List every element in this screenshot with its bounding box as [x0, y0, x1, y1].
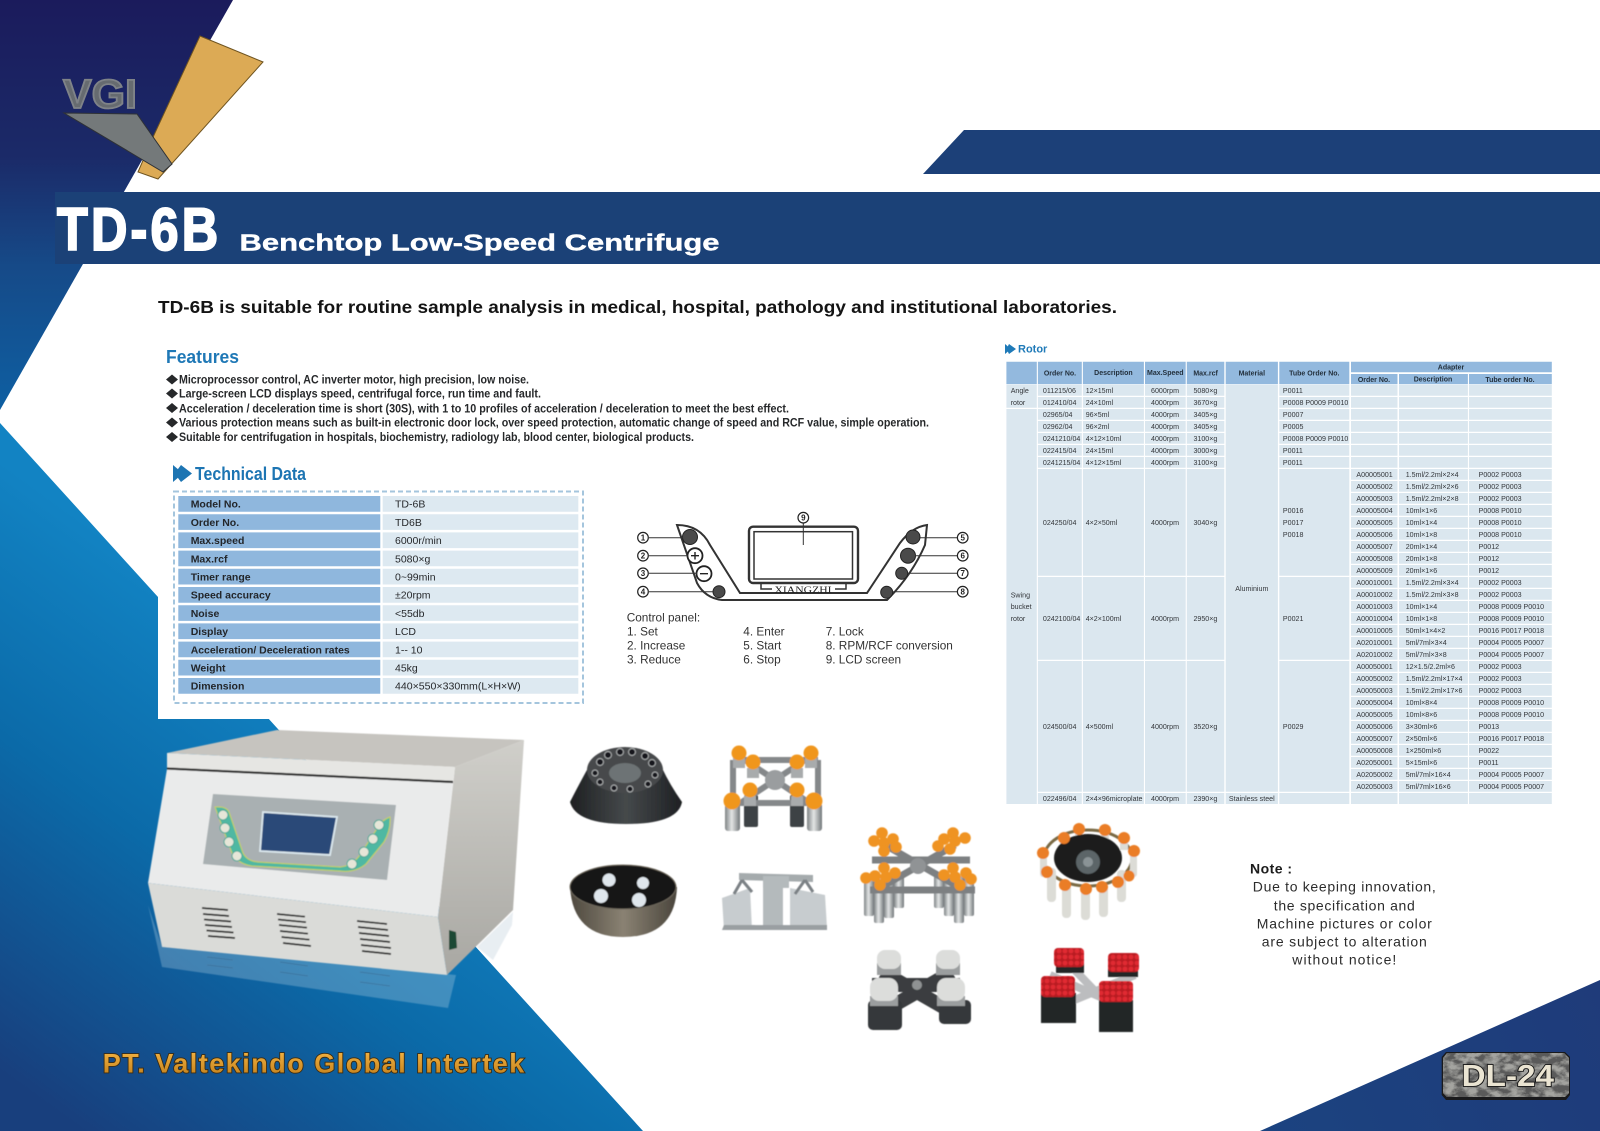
- rotor table column: adapter order number: A00005004: [1356, 507, 1393, 515]
- control panel number markers: 8: [960, 588, 965, 596]
- logo: VGI: VGI: [63, 71, 137, 117]
- rotor table column: max rcf: 3000×g: [1193, 447, 1217, 455]
- rotor table header labels: Max.rcf: [1193, 370, 1219, 378]
- rotor table column: adapter order number: A02050001: [1356, 759, 1393, 767]
- rotor table column: adapter description: [1406, 471, 1463, 791]
- rotor table column: max speed: 4000rpm: [1151, 795, 1179, 803]
- rotor table column: description: 2×4×96microplate: [1086, 795, 1143, 803]
- badge: page code: [1442, 1052, 1570, 1100]
- technical data labels: Max.speed: [191, 535, 244, 547]
- rotor table column: adapter order number: A00050004: [1356, 699, 1393, 707]
- rotor table column: max speed: [1151, 387, 1179, 803]
- features bullet list: Suitable for centrifugation in hospitals, biochemistry, radiology lab, blood center, biological products.: [179, 430, 694, 444]
- rotor table column: adapter tube order number: P0002 P0003: [1479, 687, 1522, 695]
- rotor table column: adapter description: 10ml×8×4: [1406, 699, 1437, 707]
- rotor table column: material: Aluminium: [1235, 585, 1268, 593]
- centrifuge power switch: [449, 930, 457, 950]
- rotor table column: max speed: 4000rpm: [1151, 447, 1179, 455]
- rotor table column: adapter order number: A00050006: [1356, 723, 1393, 731]
- features heading: Features: [166, 347, 239, 367]
- rotor table column: adapter tube order number: P0013: [1479, 723, 1499, 731]
- rotor table column: order number: 012410/04: [1043, 399, 1076, 407]
- control panel number markers: [638, 512, 968, 597]
- control panel legend: 4. Enter: [743, 625, 785, 639]
- rotor table column: adapter order number: A00050007: [1356, 735, 1393, 743]
- rotor table column: max rcf: 3670×g: [1193, 399, 1217, 407]
- technical data labels: Display: [191, 626, 228, 638]
- note body: Machine pictures or color: [1257, 916, 1432, 932]
- rotor table column: tube order number: P0007: [1283, 411, 1303, 419]
- rotor table column: max speed: 4000rpm: [1151, 519, 1179, 527]
- background: bottom right blue triangle: [1260, 980, 1600, 1131]
- rotor table column: adapter description: 12×1.5/2.2ml×6: [1406, 663, 1455, 671]
- background: top left dark blue corner: [0, 0, 233, 410]
- technical data labels: Model No.: [191, 499, 241, 511]
- intro sentence: TD-6B is suitable for routine sample analysis in medical, hospital, pathology and institutional laboratories.: [158, 297, 1117, 317]
- technical data labels: [191, 499, 350, 693]
- technical data labels: Speed accuracy: [191, 590, 271, 602]
- rotor table header labels: Order No.: [1044, 370, 1076, 378]
- control panel legend: 9. LCD screen: [826, 652, 901, 666]
- rotor table column: adapter description: 10ml×1×6: [1406, 507, 1437, 515]
- rotor table column: tube order number: P0011: [1283, 447, 1303, 455]
- centrifuge front upper: [148, 769, 453, 917]
- rotor table column: order number: 011215/06: [1043, 387, 1076, 395]
- footer company name: PT. Valtekindo Global Intertek: [103, 1049, 525, 1079]
- rotor table column: rotor type: bucket: [1011, 603, 1032, 611]
- rotor table column: description: 4×2×50ml: [1086, 519, 1118, 527]
- rotor table header labels: Description: [1094, 370, 1133, 377]
- control panel brand: XIANGZHI: [774, 586, 832, 596]
- rotor table header labels: Material: [1239, 370, 1265, 378]
- photo: centrifuge: [148, 730, 524, 1008]
- rotor table column: description: 4×12×10ml: [1086, 435, 1122, 443]
- rotor table column: adapter description: 10ml×1×8: [1406, 531, 1437, 539]
- rotor table column: adapter tube order number: P0008 P0010: [1479, 519, 1522, 527]
- technical data values: TD6B: [395, 517, 422, 529]
- rotor table column: order number: 0241210/04: [1043, 435, 1080, 443]
- rotor table column: adapter description: 1×250ml×6: [1406, 747, 1441, 755]
- rotor table column: adapter description: 10ml×1×8: [1406, 615, 1437, 623]
- control panel legend: [627, 611, 953, 666]
- logo: VGI: [63, 36, 263, 179]
- photo: angle rotor: [570, 747, 682, 824]
- centrifuge side: [438, 740, 524, 975]
- rotor table column: adapter order number: A00010003: [1356, 603, 1393, 611]
- rotor table column: max speed: 4000rpm: [1151, 399, 1179, 407]
- rotor table column: description: 24×15ml: [1086, 447, 1114, 455]
- rotor table column: adapter tube order number: P0002 P0003: [1479, 579, 1522, 587]
- rotor table column: adapter description: 1.5ml/2.2ml×17×6: [1406, 687, 1463, 695]
- technical data values: LCD: [395, 626, 416, 638]
- control panel number markers: 6: [960, 552, 965, 560]
- rotor table column: max speed: 4000rpm: [1151, 459, 1179, 467]
- rotor table column: max rcf: 3100×g: [1193, 459, 1217, 467]
- photo: multi-tube swing rotor: [860, 827, 977, 923]
- title band: [55, 192, 1600, 264]
- rotor table header cells: [1006, 362, 1552, 384]
- rotor table column: adapter order number: A00005005: [1356, 519, 1393, 527]
- rotor table column: max speed: 6000rpm: [1151, 387, 1179, 395]
- control panel legend: 7. Lock: [826, 625, 864, 639]
- rotor table column: description: 4×500ml: [1086, 723, 1114, 731]
- rotor table column: tube order number: P0011: [1283, 459, 1303, 467]
- rotor table header labels: Description: [1414, 376, 1452, 384]
- rotor table column: tube order number: P0005: [1283, 423, 1303, 431]
- rotor table column: adapter tube order number: P0008 P0009 P0010: [1479, 603, 1544, 611]
- background: top right dark blue stripe: [923, 130, 1600, 174]
- control panel number markers: 9: [801, 514, 806, 522]
- rotor table column: rotor type: [1011, 387, 1032, 623]
- technical data value column: [383, 496, 578, 694]
- centrifuge display panel: [203, 794, 396, 880]
- rotor table column: tube order number: P0017: [1283, 519, 1303, 527]
- control panel leader lines: [649, 523, 957, 592]
- rotor table column: adapter description: 1.5ml/2.2ml×2×4: [1406, 471, 1459, 479]
- technical data dashed frame: [174, 492, 583, 703]
- rotor table column: order number: 024250/04: [1043, 519, 1076, 527]
- centrifuge lid gap: [167, 768, 453, 782]
- technical data labels: Timer range: [191, 572, 251, 584]
- technical data label column: [178, 496, 380, 694]
- rotor table column: adapter description: 1.5ml/2.2ml×2×6: [1406, 483, 1459, 491]
- rotor table column: tube order number: P0011: [1283, 387, 1303, 395]
- rotor table column: material: Stainless steel: [1229, 795, 1275, 803]
- rotor heading icon: [1005, 344, 1016, 354]
- rotor table column: adapter order number: A00010004: [1356, 615, 1393, 623]
- technical data labels: Acceleration/ Deceleration rates: [191, 644, 350, 656]
- rotor table header labels: Adapter: [1438, 364, 1464, 372]
- rotor table header labels: [1044, 364, 1535, 384]
- rotor table column: adapter tube order number: P0011: [1479, 759, 1499, 767]
- technical data values: [395, 499, 521, 693]
- rotor table column: adapter order number: A00050002: [1356, 675, 1393, 683]
- rotor table column: rotor type: Swing: [1011, 592, 1030, 600]
- rotor table column: description: [1086, 387, 1143, 803]
- rotor table column: adapter order number: [1356, 471, 1393, 791]
- rotor table column: adapter description: 1.5ml/2.2ml×17×4: [1406, 675, 1463, 683]
- rotor table column: order number: 024500/04: [1043, 723, 1076, 731]
- rotor table column: adapter order number: A00050005: [1356, 711, 1393, 719]
- note body: Due to keeping innovation,: [1253, 879, 1436, 895]
- rotor table column: max rcf: 3405×g: [1193, 423, 1217, 431]
- technical data values: 0~99min: [395, 572, 436, 584]
- rotor table column: adapter order number: A00005003: [1356, 495, 1393, 503]
- centrifuge reflection: [148, 905, 513, 1008]
- title: model name: TD-6B: [57, 196, 221, 263]
- rotor table column: adapter description: 20ml×1×8: [1406, 555, 1437, 563]
- title: product name: Benchtop Low-Speed Centrifuge: [240, 230, 720, 256]
- rotor table column: order number: 022415/04: [1043, 447, 1076, 455]
- background: lower left blue wedge: [0, 423, 643, 1131]
- control panel legend: 2. Increase: [627, 639, 686, 653]
- note: [1250, 860, 1436, 968]
- rotor table column: adapter description: 1.5ml/2.2ml×3×8: [1406, 591, 1459, 599]
- rotor table column: adapter description: 10ml×1×4: [1406, 519, 1437, 527]
- rotor table column: tube order number: [1283, 387, 1348, 731]
- photo: red microtube rotor: [1041, 948, 1139, 1032]
- technical data heading: Technical Data: [195, 464, 307, 484]
- rotor table column: adapter description: 5ml/7ml×3×4: [1406, 639, 1447, 647]
- centrifuge vents: [202, 908, 391, 954]
- photo: radial rotor with white tubes: [1037, 823, 1140, 920]
- rotor table column: adapter tube order number: P0002 P0003: [1479, 591, 1522, 599]
- rotor table column: rotor type: rotor: [1011, 615, 1026, 623]
- rotor table column: order number: 0242100/04: [1043, 615, 1080, 623]
- rotor table block: [1005, 344, 1552, 804]
- rotor table column: adapter tube order number: P0002 P0003: [1479, 483, 1522, 491]
- rotor heading: Rotor: [1018, 344, 1048, 356]
- rotor table column: adapter description: 3×30ml×6: [1406, 723, 1437, 731]
- rotor table column: order number: 022496/04: [1043, 795, 1076, 803]
- rotor table column: adapter tube order number: P0002 P0003: [1479, 675, 1522, 683]
- technical data values: <55db: [395, 608, 425, 620]
- note body: [1253, 879, 1436, 968]
- control panel number markers: 1: [641, 534, 646, 542]
- rotor table column: description: 4×2×100ml: [1086, 615, 1122, 623]
- rotor table column: max rcf: 3520×g: [1193, 723, 1217, 731]
- rotor table column: adapter description: 20ml×1×4: [1406, 543, 1437, 551]
- rotor table header labels: Tube order No.: [1485, 377, 1535, 384]
- control panel legend: 3. Reduce: [627, 652, 681, 666]
- rotor table column: tube order number: P0016: [1283, 507, 1303, 515]
- rotor table column: adapter order number: A02010001: [1356, 639, 1393, 647]
- technical data values: 45kg: [395, 662, 418, 674]
- rotor table column: adapter tube order number: P0008 P0010: [1479, 507, 1522, 515]
- rotor table column: tube order number: P0029: [1283, 723, 1303, 731]
- rotor table column: adapter order number: A00050008: [1356, 747, 1393, 755]
- technical data values: 440×550×330mm(L×H×W): [395, 681, 521, 693]
- rotor table column: adapter order number: A00050003: [1356, 687, 1393, 695]
- rotor table column: max rcf: 3100×g: [1193, 435, 1217, 443]
- rotor table column: adapter order number: A00005002: [1356, 483, 1393, 491]
- control panel number markers: 4: [641, 588, 646, 596]
- rotor table column: adapter description: 2×50ml×6: [1406, 735, 1437, 743]
- rotor table column: description: 96×5ml: [1086, 411, 1110, 419]
- rotor table column: adapter order number: A02050002: [1356, 771, 1393, 779]
- control panel legend: 8. RPM/RCF conversion: [826, 639, 953, 653]
- rotor table header labels: Order No.: [1358, 377, 1390, 384]
- rotor table column: adapter tube order number: P0016 P0017 P0018: [1479, 627, 1544, 635]
- rotor table column: order number: 0241215/04: [1043, 459, 1080, 467]
- rotor table column: adapter tube order number: P0004 P0005 P0007: [1479, 651, 1544, 659]
- rotor table column: description: 96×2ml: [1086, 423, 1110, 431]
- rotor table column: adapter tube order number: P0008 P0009 P0010: [1479, 699, 1544, 707]
- rotor table column: max speed: 4000rpm: [1151, 615, 1179, 623]
- rotor table column: adapter tube order number: P0008 P0010: [1479, 531, 1522, 539]
- technical data values: ±20rpm: [395, 590, 431, 602]
- rotor table column: adapter order number: A02050003: [1356, 783, 1393, 791]
- rotor table column: tube order number: P0021: [1283, 615, 1303, 623]
- rotor table column: adapter order number: A00005001: [1356, 471, 1393, 479]
- rotor table column: max rcf: [1193, 387, 1217, 803]
- control panel buttons: [682, 530, 920, 598]
- rotor table column: adapter tube order number: P0012: [1479, 555, 1499, 563]
- rotor table column: order number: 02962/04: [1043, 423, 1073, 431]
- rotor table column: adapter order number: A00050001: [1356, 663, 1393, 671]
- rotor table column: order number: 02965/04: [1043, 411, 1073, 419]
- rotor table column: max speed: 4000rpm: [1151, 723, 1179, 731]
- rotor table column: adapter tube order number: P0008 P0009 P0010: [1479, 615, 1544, 623]
- rotor table column: adapter tube order number: P0002 P0003: [1479, 663, 1522, 671]
- control panel legend: Control panel:: [627, 611, 700, 625]
- rotor table column: adapter tube order number: P0004 P0005 P0007: [1479, 639, 1544, 647]
- note body: without notice!: [1291, 952, 1396, 968]
- photo: dark bucket rotor: [868, 950, 971, 1030]
- rotor table column: description: 12×15ml: [1086, 387, 1114, 395]
- technical data labels: Weight: [191, 662, 226, 674]
- rotor table column: adapter description: 1.5ml/2.2ml×3×4: [1406, 579, 1459, 587]
- rotor table column: max speed: 4000rpm: [1151, 435, 1179, 443]
- rotor table column: order number: [1043, 387, 1080, 803]
- technical data labels: Dimension: [191, 681, 244, 693]
- technical data values: TD-6B: [395, 499, 425, 511]
- rotor table header labels: Tube Order No.: [1289, 370, 1340, 378]
- technical data labels: Order No.: [191, 517, 239, 529]
- centrifuge front lower: [148, 883, 447, 975]
- rotor table column: adapter order number: A00005009: [1356, 567, 1393, 575]
- note body: are subject to alteration: [1262, 934, 1427, 950]
- rotor table column: adapter tube order number: [1479, 471, 1544, 791]
- features block: [166, 347, 929, 444]
- control panel number markers: 3: [641, 569, 646, 578]
- rotor table column: tube order number: P0018: [1283, 531, 1303, 539]
- technical data block: [173, 464, 583, 703]
- rotor table column: adapter order number: A00010001: [1356, 579, 1393, 587]
- features bullet list: Microprocessor control, AC inverter motor, high precision, low noise.: [179, 373, 529, 387]
- control panel outline: [677, 525, 927, 600]
- rotor table column: adapter tube order number: P0012: [1479, 543, 1499, 551]
- technical data values: 5080×g: [395, 553, 430, 565]
- technical data values: 6000r/min: [395, 535, 442, 547]
- rotor table column: adapter order number: A00005008: [1356, 555, 1393, 563]
- rotor table column: max speed: 4000rpm: [1151, 423, 1179, 431]
- rotor table column: adapter description: 10ml×1×4: [1406, 603, 1437, 611]
- rotor table column: max rcf: 2390×g: [1193, 795, 1217, 803]
- control panel legend: 5. Start: [743, 639, 782, 653]
- photo: sealed bowl rotor: [570, 865, 677, 937]
- rotor table column: max rcf: 3040×g: [1193, 519, 1217, 527]
- rotor table column: adapter tube order number: P0002 P0003: [1479, 471, 1522, 479]
- rotor table column: adapter order number: A02010002: [1356, 651, 1393, 659]
- rotor table column: tube order number: P0008 P0009 P0010: [1283, 399, 1348, 407]
- rotor table column: max speed: 4000rpm: [1151, 411, 1179, 419]
- control panel legend: 1. Set: [627, 625, 659, 639]
- rotor table column: max rcf: 5080×g: [1193, 387, 1217, 395]
- rotor table column: adapter tube order number: P0022: [1479, 747, 1499, 755]
- rotor table column: adapter tube order number: P0008 P0009 P0010: [1479, 711, 1544, 719]
- rotor table column: adapter tube order number: P0004 P0005 P0007: [1479, 771, 1544, 779]
- control panel number markers: 5: [960, 534, 965, 542]
- control panel legend: 6. Stop: [743, 652, 781, 666]
- rotor table column: description: 24×10ml: [1086, 399, 1114, 407]
- rotor table column: rotor type: Angle: [1011, 387, 1029, 395]
- technical data labels: Max.rcf: [191, 553, 228, 565]
- features bullet list: Various protection means such as built-in electronic door lock, over speed protection, automatic change of speed and RCF value, simple operation.: [179, 416, 929, 430]
- technical data heading icon: [173, 465, 192, 482]
- centrifuge lid front: [167, 753, 455, 782]
- features bullet list: [166, 373, 929, 444]
- rotor table column: adapter description: 20ml×1×6: [1406, 567, 1437, 575]
- rotor table column: rotor type: rotor: [1011, 399, 1026, 407]
- badge: page code: DL-24: [1462, 1058, 1555, 1093]
- white content panel: [158, 265, 988, 719]
- rotor table column: adapter order number: A00010005: [1356, 627, 1393, 635]
- features bullet list: Large-screen LCD displays speed, centrifugal force, run time and fault.: [179, 387, 541, 401]
- rotor table column: adapter order number: A00005007: [1356, 543, 1393, 551]
- photo: microplate holder: [722, 873, 827, 930]
- rotor table column: adapter description: 1.5ml/2.2ml×2×8: [1406, 495, 1459, 503]
- rotor table column: adapter description: 5ml/7ml×3×8: [1406, 651, 1447, 659]
- control panel diagram: [627, 512, 968, 666]
- rotor table column: max rcf: 3405×g: [1193, 411, 1217, 419]
- note heading: Note :: [1250, 860, 1292, 876]
- rotor table column: adapter tube order number: P0016 P0017 P0018: [1479, 735, 1544, 743]
- rotor table column: adapter description: 10ml×8×6: [1406, 711, 1437, 719]
- rotor table column: adapter description: 5ml/7ml×16×4: [1406, 771, 1451, 779]
- rotor table column: adapter order number: A00005006: [1356, 531, 1393, 539]
- rotor table column: description: 4×12×15ml: [1086, 459, 1122, 467]
- control panel number markers: 2: [641, 552, 646, 560]
- rotor table column: adapter description: 5×15ml×6: [1406, 759, 1437, 767]
- rotor table column: adapter tube order number: P0012: [1479, 567, 1499, 575]
- rotor table header labels: Max.Speed: [1147, 370, 1184, 377]
- rotor table column: material: [1229, 585, 1275, 803]
- control panel number markers: 7: [960, 569, 965, 578]
- centrifuge lid top: [167, 730, 524, 767]
- rotor table column: adapter description: 5ml/7ml×16×6: [1406, 783, 1451, 791]
- rotor table column: adapter tube order number: P0004 P0005 P0007: [1479, 783, 1544, 791]
- note body: the specification and: [1274, 897, 1415, 913]
- photo: swing rotor with orange caps: [724, 746, 822, 831]
- rotor table column: max rcf: 2950×g: [1193, 615, 1217, 623]
- technical data values: 1-- 10: [395, 644, 423, 656]
- rotor table body cells: [1006, 385, 1552, 804]
- rotor table column: adapter order number: A00010002: [1356, 591, 1393, 599]
- rotor table column: tube order number: P0008 P0009 P0010: [1283, 435, 1348, 443]
- rotor table column: adapter tube order number: P0002 P0003: [1479, 495, 1522, 503]
- features bullet list: Acceleration / deceleration time is short (30S), with 1 to 10 profiles of acceleration / deceleration to meet the best effect.: [179, 401, 789, 415]
- rotor table column: adapter description: 50ml×1×4×2: [1406, 627, 1445, 635]
- technical data labels: Noise: [191, 608, 219, 620]
